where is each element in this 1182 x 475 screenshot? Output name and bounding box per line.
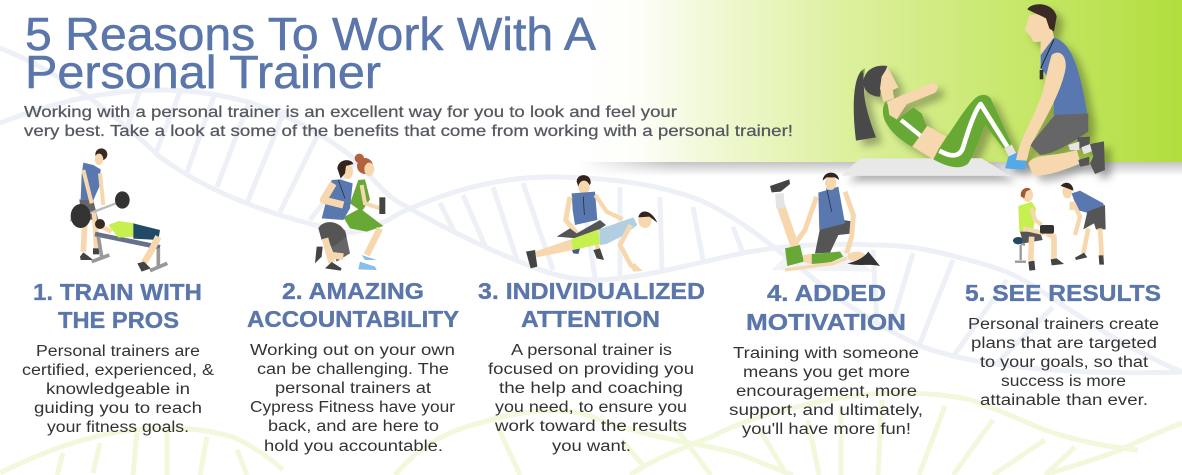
panel: reason 3 [478, 278, 705, 455]
heading: reason 2: 2. AMAZING [282, 278, 424, 304]
body: reason 2: can be challenging. The [257, 361, 449, 378]
body: reason 3: focused on providing you [488, 361, 694, 378]
title [25, 8, 596, 98]
heading: reason 1: THE PROS [58, 307, 179, 333]
icon: trainer stretching woman's leg [770, 173, 880, 272]
heading: reason 2 [247, 278, 459, 332]
hero green gradient banner [580, 0, 1182, 176]
panel: reason 4 [729, 280, 923, 438]
body: reason 2: hold you accountable. [264, 438, 443, 455]
panel: reason 5 [965, 280, 1161, 409]
heading: reason 2: ACCOUNTABILITY [247, 306, 459, 332]
body: reason 1: guiding you to reach [34, 400, 202, 417]
body: reason 5: Personal trainers create [968, 316, 1159, 333]
title: 5 Reasons To Work With A [25, 8, 596, 60]
hero illustration: trainer holding feet during sit-ups [842, 4, 1105, 176]
trainer kneeling [1016, 4, 1105, 175]
body: reason 1: your fitness goals. [47, 419, 189, 436]
icon: trainer assisting push-up [526, 175, 657, 272]
body: reason 3: work toward the results [494, 418, 687, 435]
body: reason 2: personal trainers at [275, 380, 432, 397]
icon: trainer and woman doing lunges [315, 154, 385, 271]
heading: reason 1: 1. TRAIN WITH [33, 279, 202, 305]
body: reason 3: you want. [552, 438, 631, 455]
heading: reason 3: ATTENTION [521, 306, 660, 332]
body: reason 3 [488, 342, 694, 455]
exercise mat [842, 158, 1010, 176]
heading: reason 5: 5. SEE RESULTS [965, 280, 1161, 306]
body: reason 5: plans that are targeted [971, 335, 1157, 352]
body: reason 3: the help and coaching [499, 380, 683, 397]
body: reason 5: attainable than ever. [980, 392, 1148, 409]
heading: reason 1 [33, 279, 202, 333]
body: reason 1: Personal trainers are [36, 343, 200, 360]
body: reason 3: you need, to ensure you [495, 399, 687, 416]
intro text: very best. Take a look at some of the benefits that come from working with a personal trainer! [24, 123, 793, 140]
body: reason 2 [250, 342, 455, 455]
title: Personal Trainer [25, 46, 381, 98]
body: reason 2: back, and are here to [268, 418, 439, 435]
body: reason 4: encouragement, more [736, 383, 917, 400]
panel: reason 2 [247, 278, 459, 455]
body: reason 3: A personal trainer is [511, 342, 672, 359]
body: reason 2: Cypress Fitness have your [250, 399, 455, 416]
heading: reason 4: MOTIVATION [746, 309, 906, 335]
heading: reason 3 [478, 278, 705, 332]
body: reason 4 [729, 345, 923, 438]
body: reason 4: you'll have more fun! [742, 421, 911, 438]
background: green DNA helix [0, 393, 1182, 475]
body: reason 1: knowledgeable in [46, 381, 190, 398]
body: reason 1 [22, 343, 215, 436]
body: reason 4: support, and ultimately, [729, 402, 923, 419]
body: reason 4: means you get more [743, 364, 910, 381]
icon: seated man with dumbbell and trainer [1013, 183, 1106, 271]
intro text: Working with a personal trainer is an excellent way for you to look and feel your [24, 104, 678, 121]
body: reason 1: certified, experienced, & [22, 362, 215, 379]
body: reason 2: Working out on your own [250, 342, 455, 359]
background: blue DNA helix [0, 48, 1182, 373]
panel: reason 1 [22, 279, 215, 436]
heading: reason 3: 3. INDIVIDUALIZED [478, 278, 705, 304]
body: reason 5: to your goals, so that [980, 354, 1149, 371]
intro text [24, 104, 793, 140]
body: reason 4: Training with someone [733, 345, 919, 362]
icon: trainer spotting bench press [70, 148, 167, 272]
body: reason 5 [968, 316, 1159, 409]
heading: reason 4 [746, 280, 906, 335]
body: reason 5: success is more [1001, 373, 1126, 390]
woman doing sit-up [854, 66, 1027, 170]
heading: reason 4: 4. ADDED [767, 280, 886, 306]
